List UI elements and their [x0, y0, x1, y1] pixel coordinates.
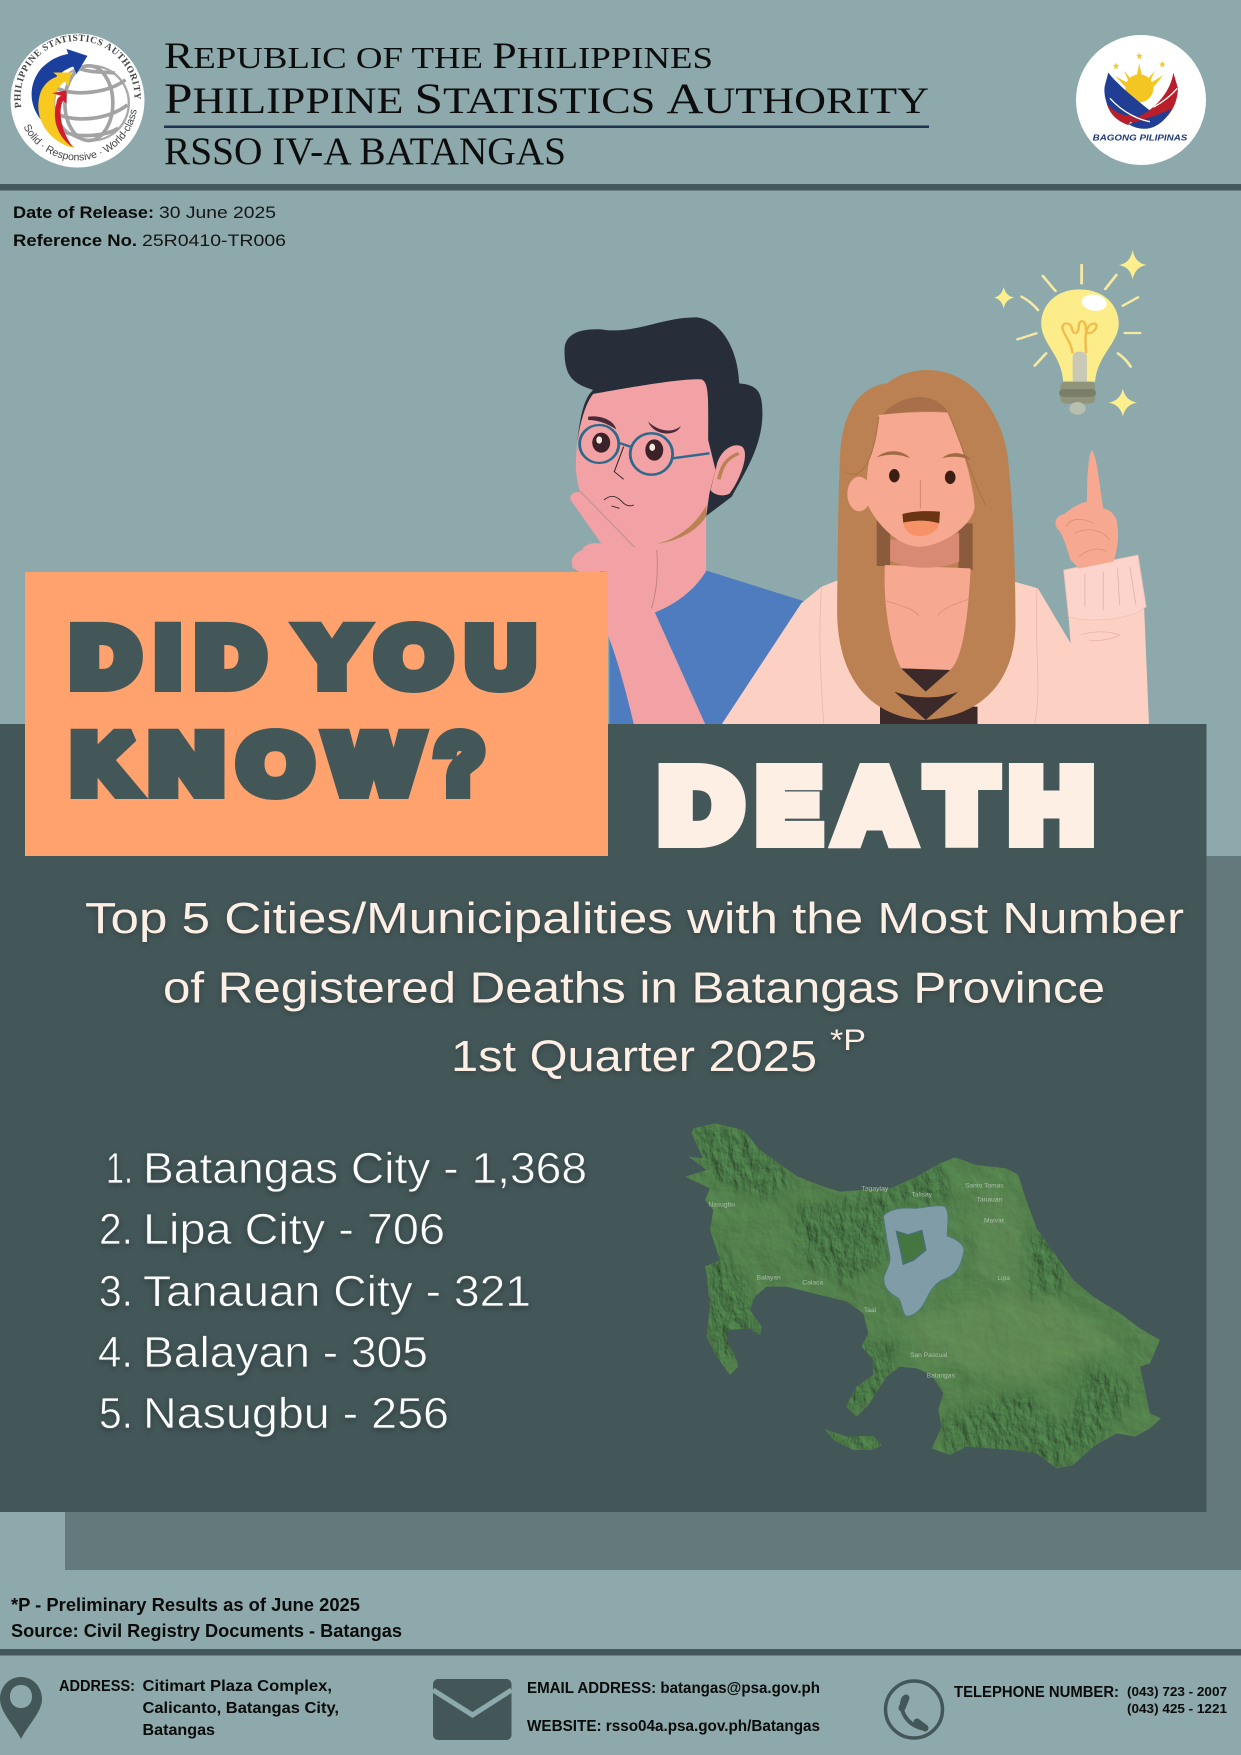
- heading: death: A: [837, 750, 912, 862]
- icon: lightbulb: [994, 250, 1147, 417]
- logo: Philippine Statistics Authority seal: Solid · Responsive · World-class: [24, 110, 136, 161]
- icon: telephone: [886, 1681, 942, 1738]
- heading: death: D: [660, 750, 742, 862]
- footnotes: *P - Preliminary Results as of June 2025: [11, 1595, 360, 1615]
- map of Batangas province: Tagaytay: [862, 1186, 889, 1193]
- heading: did you: I: [156, 612, 180, 703]
- map of Batangas province: Santo Tomas: [965, 1182, 1004, 1189]
- map of Batangas province: Tanauan: [977, 1196, 1003, 1203]
- logo: Bagong Pilipinas: BAGONG PILIPINAS: [1093, 132, 1188, 142]
- illustration: thinking man and woman with lightbulb: [564, 250, 1149, 724]
- Taal volcano island: [897, 1231, 926, 1264]
- heading: did you: U: [467, 612, 534, 703]
- subtitle: of Registered Deaths in Batangas Province: [163, 964, 1105, 1012]
- heading: death: E: [758, 750, 820, 862]
- contact: address: ADDRESS:: [59, 1678, 135, 1695]
- contact: address: [0, 1677, 339, 1739]
- heading: did you: Y: [301, 612, 363, 703]
- map of Batangas province: Malvar: [984, 1217, 1005, 1224]
- ranked list: Lipa City - 706: [143, 1205, 445, 1254]
- subtitle: Top 5 Cities/Municipalities with the Most Number: [85, 894, 1184, 943]
- contact: telephone: (043) 723 - 2007: [1127, 1685, 1227, 1699]
- footnotes: Source: Civil Registry Documents - Batangas: [11, 1621, 402, 1641]
- icon: envelope: [433, 1679, 512, 1740]
- contact: telephone: [886, 1681, 1227, 1738]
- contact: address: Citimart Plaza Complex,: [142, 1678, 332, 1695]
- icon: location pin: [0, 1677, 42, 1739]
- contact: email and website: EMAIL ADDRESS: batangas@psa.gov.ph: [527, 1680, 820, 1697]
- logo: Philippine Statistics Authority seal: [10, 34, 144, 168]
- contact: address: Batangas: [142, 1722, 215, 1739]
- subtitle: 1st Quarter 2025: [451, 1032, 817, 1081]
- heading: know: ?: [436, 719, 484, 810]
- subtitle: [85, 894, 1184, 1081]
- contact: email and website: WEBSITE: rsso04a.psa.gov.ph/Batangas: [527, 1718, 820, 1735]
- ranked list: 3.: [99, 1267, 133, 1316]
- header band: [10, 34, 1206, 173]
- logo: Bagong Pilipinas: [1076, 35, 1206, 165]
- map of Batangas province: [685, 1124, 1161, 1468]
- contact: telephone: TELEPHONE NUMBER:: [954, 1684, 1119, 1701]
- heading: Philippine Statistics Authority: PHILIPPINE STATISTICS AUTHORITY: [164, 76, 929, 123]
- main dark panel: [0, 724, 1206, 1512]
- map of Batangas province: Taal: [864, 1307, 877, 1314]
- map of Batangas province: San Pascual: [910, 1352, 948, 1359]
- map of Batangas province: Lipa: [997, 1275, 1010, 1282]
- map of Batangas province: Calaca: [802, 1279, 823, 1286]
- woman figure: [722, 370, 1149, 724]
- ranked list: Batangas City - 1,368: [143, 1144, 587, 1193]
- Taal lake: [883, 1206, 964, 1316]
- release info: [13, 203, 286, 250]
- background offset panel: [65, 856, 1241, 1570]
- ranked list: Balayan - 305: [143, 1328, 428, 1377]
- contact: address: Calicanto, Batangas City,: [142, 1700, 339, 1717]
- map of Batangas province: Talisay: [912, 1191, 933, 1198]
- ranked list: 4.: [98, 1328, 133, 1377]
- heading: Republic of the Philippines: REPUBLIC OF THE PHILIPPINES: [164, 36, 713, 77]
- ranked list: Tanauan City - 321: [143, 1267, 531, 1316]
- subtitle: *P: [830, 1024, 866, 1057]
- reference number: Reference No.: [13, 231, 137, 250]
- footer divider bar: [0, 1649, 1241, 1656]
- date of release: Date of Release:: [13, 203, 154, 222]
- footnotes: [11, 1595, 402, 1641]
- man figure: [564, 317, 805, 724]
- ranked list: [98, 1144, 587, 1438]
- heading: RSSO IV-A Batangas: RSSO IV-A BATANGAS: [164, 130, 566, 173]
- heading: did you: D: [197, 612, 264, 703]
- heading: death: T: [929, 750, 995, 862]
- reference number: 25R0410-TR006: [142, 231, 286, 250]
- did you know banner: [25, 572, 608, 856]
- heading: did you: D: [72, 612, 139, 703]
- date of release: 30 June 2025: [159, 203, 276, 222]
- ranked list: 5.: [99, 1389, 133, 1438]
- heading: know: W: [329, 719, 420, 810]
- heading: know: N: [150, 719, 223, 810]
- ranked list: 2.: [99, 1205, 133, 1254]
- map of Batangas province: Nasugbu: [708, 1202, 735, 1209]
- logo: Philippine Statistics Authority seal: PHILIPPINE STATISTICS AUTHORITY: [14, 34, 141, 108]
- map of Batangas province: Balayan: [757, 1274, 781, 1281]
- heading: did you: O: [377, 612, 450, 703]
- ranked list: 1.: [106, 1144, 133, 1193]
- contact: email and website: [433, 1679, 820, 1740]
- contact: telephone: (043) 425 - 1221: [1127, 1702, 1227, 1716]
- heading: death: H: [1010, 750, 1093, 862]
- map of Batangas province: Batangas: [927, 1372, 955, 1379]
- heading: know: K: [72, 719, 134, 810]
- heading: know: O: [239, 719, 312, 810]
- header divider bar: [0, 184, 1241, 190]
- ranked list: Nasugbu - 256: [143, 1389, 449, 1438]
